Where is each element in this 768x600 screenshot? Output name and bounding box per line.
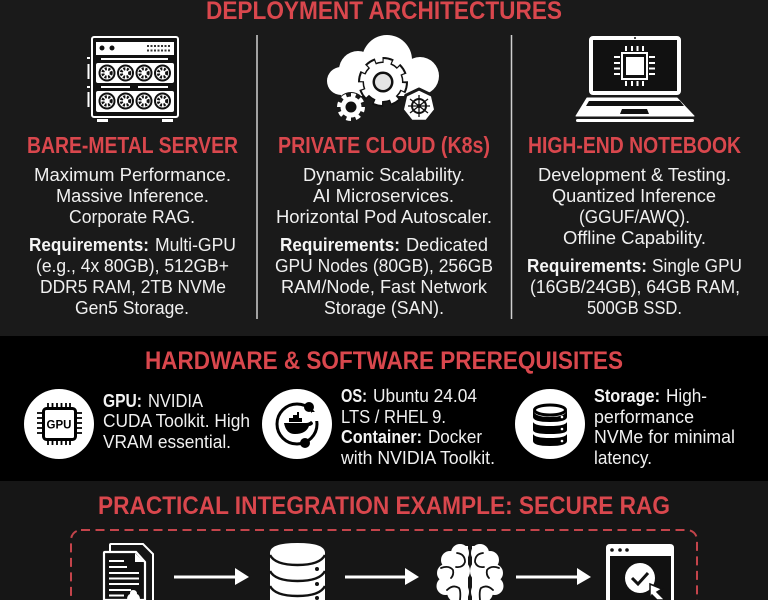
icon: browser with verified check — [606, 544, 674, 600]
requirements: (16GB/24GB), 64GB RAM, — [530, 276, 740, 297]
description: Quantized Inference — [552, 185, 716, 206]
description: Development & Testing. — [538, 164, 731, 185]
text: gpu: VRAM essential. — [103, 431, 231, 452]
requirements: RAM/Node, Fast Network — [281, 276, 488, 297]
text: storage: Storage: — [594, 385, 660, 406]
icon: storage stack — [515, 389, 585, 459]
description: Dynamic Scalability. — [303, 164, 465, 185]
text: os and container: with NVIDIA Toolkit. — [340, 447, 495, 468]
text: gpu — [103, 390, 250, 452]
icon: server — [87, 37, 178, 122]
column: private cloud — [275, 35, 493, 318]
heading: secure rag: PRACTICAL INTEGRATION EXAMPLE: SECURE RAG — [98, 492, 670, 520]
description — [276, 164, 492, 227]
description: Corporate RAG. — [69, 206, 195, 227]
icon: documents — [104, 544, 153, 600]
arrow: documents to database — [174, 568, 249, 585]
requirements: Gen5 Storage. — [75, 297, 189, 318]
icon: laptop with chip — [576, 37, 694, 122]
description — [538, 164, 731, 248]
text: storage: High- — [666, 385, 707, 406]
requirements: Multi-GPU — [155, 234, 236, 255]
icon: brain — [436, 544, 504, 600]
requirements: Requirements: — [527, 255, 647, 276]
column: high-end notebook — [527, 37, 742, 318]
text: gpu: NVIDIA — [148, 390, 204, 411]
icon: gpu chip — [24, 389, 94, 459]
description: Maximum Performance. — [34, 164, 231, 185]
requirements: DDR5 RAM, 2TB NVMe — [40, 276, 226, 297]
text: os and container: OS: — [341, 385, 367, 406]
requirements: Storage (SAN). — [324, 297, 444, 318]
arrow: database to model — [345, 568, 419, 585]
description: Massive Inference. — [56, 185, 209, 206]
text: gpu: CUDA Toolkit. High — [103, 410, 250, 431]
description: Horizontal Pod Autoscaler. — [276, 206, 492, 227]
icon: docker on ubuntu ring — [262, 389, 332, 459]
icon: vector database — [270, 543, 325, 600]
text: os and container: Ubuntu 24.04 — [373, 385, 477, 406]
panel: hardware and software prerequisites — [0, 336, 768, 481]
panel: deployment architectures — [0, 0, 768, 336]
requirements: 500GB SSD. — [587, 297, 682, 318]
requirements: Requirements: — [280, 234, 400, 255]
requirements: Single GPU — [652, 255, 742, 276]
text: storage: latency. — [594, 447, 652, 468]
text: storage: NVMe for minimal — [594, 426, 735, 447]
icon: gpu chip: GPU — [47, 420, 71, 432]
requirements: (e.g., 4x 80GB), 512GB+ — [36, 255, 229, 276]
column title: BARE-METAL SERVER — [27, 132, 238, 158]
panel: practical integration example — [71, 492, 697, 600]
text: os and container: Docker — [428, 426, 482, 447]
icon: cloud with gears and kubernetes — [327, 35, 439, 122]
description: Offline Capability. — [563, 227, 706, 248]
requirements: GPU Nodes (80GB), 256GB — [275, 255, 493, 276]
dashed frame — [71, 530, 697, 600]
text: os and container: Container: — [341, 426, 422, 447]
description: AI Microservices. — [313, 185, 454, 206]
heading: prerequisites: HARDWARE & SOFTWARE PREREQUISITES — [145, 347, 623, 375]
text: os and container: LTS / RHEL 9. — [341, 406, 446, 427]
text: os and container — [340, 385, 495, 468]
requirements — [275, 234, 493, 318]
arrow: model to output — [516, 568, 591, 585]
requirements: Requirements: — [29, 234, 149, 255]
requirements — [527, 255, 742, 318]
column: bare-metal server — [27, 37, 238, 318]
requirements: Dedicated — [406, 234, 488, 255]
text: gpu: GPU: — [103, 390, 142, 411]
description — [34, 164, 231, 227]
text: storage: performance — [594, 406, 694, 427]
requirements — [29, 234, 236, 318]
description: (GGUF/AWQ). — [579, 206, 690, 227]
text: storage — [594, 385, 735, 468]
column title: PRIVATE CLOUD (K8s) — [278, 132, 490, 158]
